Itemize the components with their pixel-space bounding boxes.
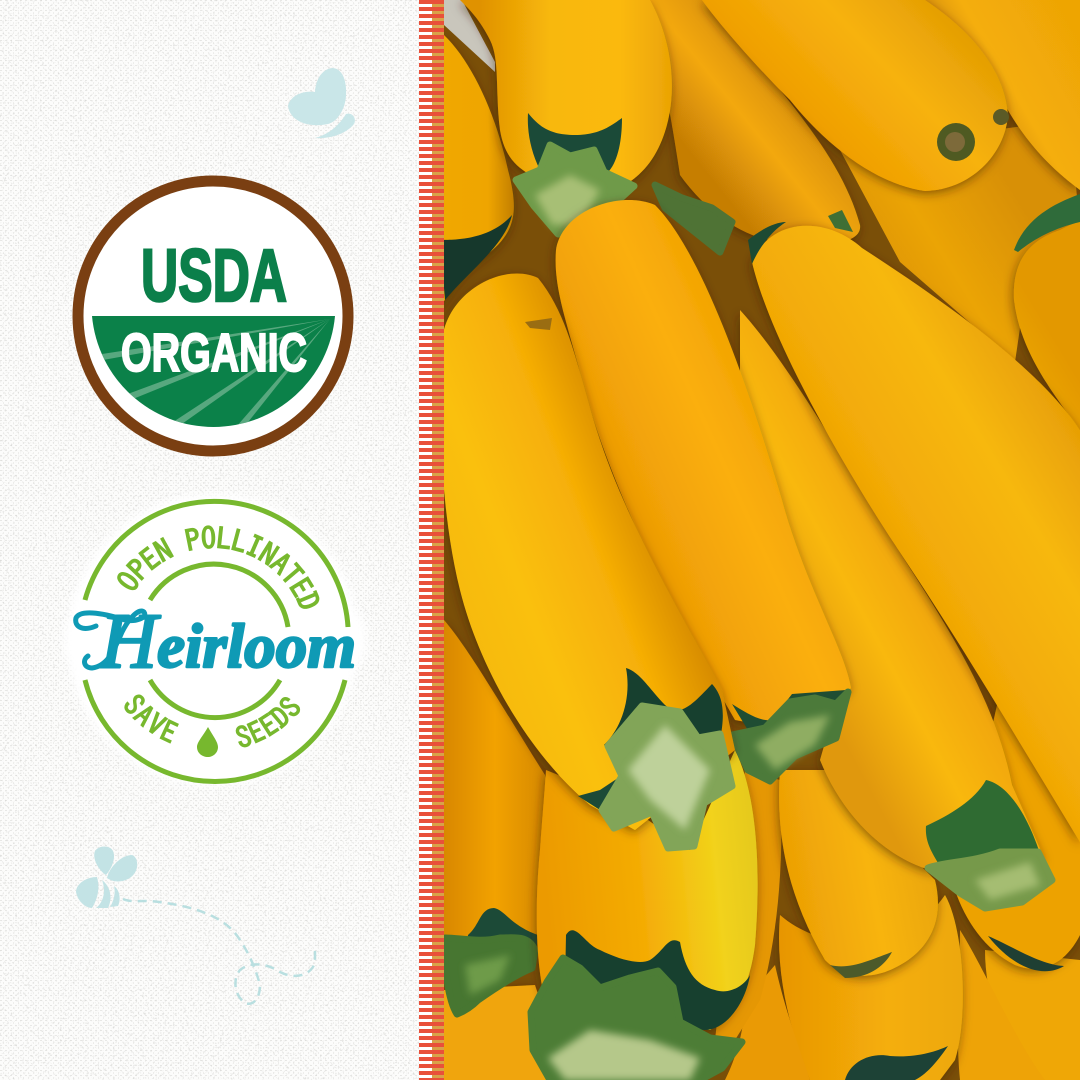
zucchini: front left long [440,273,735,830]
zucchini: far back lower right [985,950,1080,1080]
badge text: SEEDS: SEEDS [236,697,300,748]
badge text: SAVE: SAVE [124,694,179,744]
badge arcs [85,501,348,782]
badge text: Heirloom: Heirloom [99,597,356,684]
photo backdrop [432,0,1080,1080]
badge text: USDA: USDA [141,234,287,317]
zucchini: bottom left [444,985,585,1080]
badge: USDA Organic [78,181,348,451]
zucchini: lower right, dark tip [955,670,1080,969]
zucchini: left lower [444,620,548,940]
badge text: OPEN POLLINATED: OPEN POLLINATED [117,525,320,609]
stem: big bottom centre [531,958,742,1080]
badge field: green half circle [92,316,335,427]
stem: front left [578,668,732,848]
dark band: big bottom centre [565,930,750,1030]
stem: bottom left [445,908,538,1014]
stem cap: right big diagonal [748,222,786,264]
zucchini: rear center narrow [640,0,860,244]
badge text: ORGANIC: ORGANIC [121,323,307,383]
icon: seed drop [197,727,218,757]
icon: bee with dashed flight trail [76,846,315,1004]
zucchini: long diagonal behind right [740,310,1045,870]
zucchini: top right corner [920,0,1080,190]
stem: right edge [1014,194,1080,252]
badge ring [78,181,348,451]
stem: centre long [732,690,848,781]
dark tip: lower right [988,936,1064,971]
badge: Heirloom [61,494,367,788]
zucchini: rear right [840,120,1080,362]
zucchini: centre long [556,200,851,722]
zucchini: big bottom centre [537,750,758,1030]
photo: yellow zucchini pile [432,0,1080,1080]
zucchini: lower middle back [958,930,1045,1080]
pale surface at top corner [444,0,495,72]
zucchini: top centre with stem [460,0,672,195]
zucchini: right edge short [1014,220,1080,430]
stem end: dark band left [440,215,512,300]
stripe border [419,0,444,1080]
stem: top centre [516,113,634,234]
zucchini: lower centre right [779,770,938,976]
zucchini: bottom sliver [725,965,810,1080]
flourish on H of Heirloom [76,611,145,668]
icon: butterfly [288,68,355,138]
zucchini: bottom centre right [779,895,963,1080]
badge backing [64,494,366,786]
stem tip: behind right [828,210,853,232]
stem tip: lower centre right [830,952,892,978]
stem tip: top diagonal [937,109,1009,161]
zucchini: vertical sliver [715,770,781,1040]
zucchini: top diagonal [702,0,1008,191]
badge field rays [102,319,330,424]
zucchini: top left edge [438,35,514,310]
stem: behind center [655,185,732,252]
dark tip: bottom centre right [845,1046,948,1080]
speckles on front left [525,318,552,330]
zucchini: right big diagonal [752,226,1080,842]
stem: lower right large [926,780,1052,908]
panel: linen background [0,0,432,1080]
